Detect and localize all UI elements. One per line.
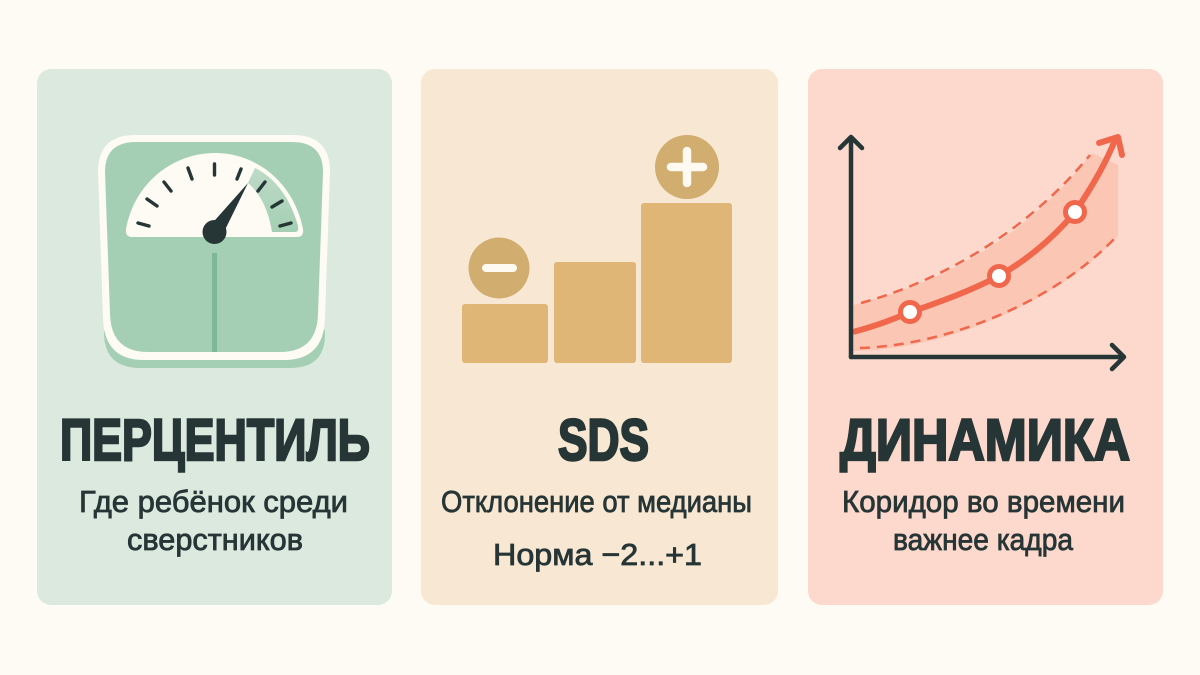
text: SDS description: [441, 484, 752, 572]
heading: dynamics: ДИНАМИКА: [840, 408, 1130, 473]
text: dynamics description: важнее кадра: [893, 522, 1074, 557]
heading: SDS: SDS: [558, 408, 649, 473]
chart: growth corridor: [840, 137, 1124, 369]
text: SDS description: Отклонение от медианы: [441, 484, 752, 519]
heading: percentile: ПЕРЦЕНТИЛЬ: [60, 408, 370, 473]
text: SDS description: Норма −2...+1: [493, 537, 702, 572]
text: percentile description: [79, 484, 348, 557]
panel: dynamics: [808, 69, 1163, 605]
panel: SDS: [421, 69, 778, 605]
text: percentile description: Где ребёнок среди: [79, 484, 348, 519]
text: dynamics description: [842, 484, 1125, 557]
panel: percentile: [37, 69, 392, 605]
icon: bars with minus and plus: [462, 135, 732, 363]
text: dynamics description: Коридор во времени: [842, 484, 1125, 519]
text: percentile description: сверстников: [127, 522, 303, 557]
icon: bathroom scale: [98, 135, 330, 368]
